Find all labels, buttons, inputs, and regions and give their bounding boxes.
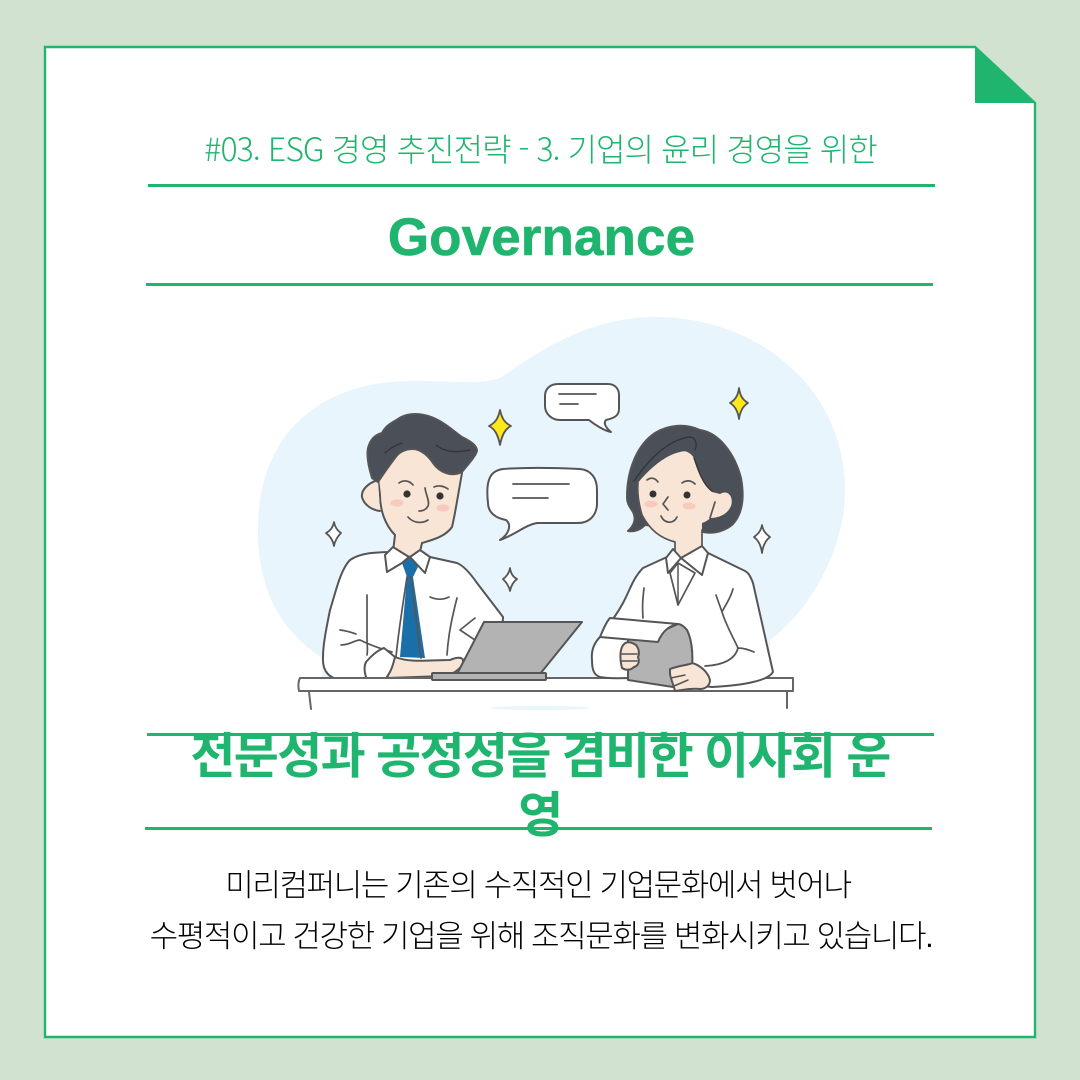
rule above heading bbox=[147, 733, 934, 736]
speech bubble: small bbox=[545, 384, 619, 432]
speech bubble: large bbox=[487, 468, 597, 540]
sparkle: white left bbox=[326, 522, 341, 546]
sparkle: yellow right bbox=[730, 388, 748, 419]
body text: 수평적이고 건강한 기업을 위해 조직문화를 변화시키고 있습니다. bbox=[150, 919, 932, 954]
body text bbox=[150, 868, 932, 954]
sparkle: white right bbox=[754, 525, 770, 553]
woman bbox=[592, 426, 773, 691]
sparkle: white centre bbox=[503, 568, 517, 591]
man bbox=[323, 414, 503, 681]
heading bbox=[190, 730, 890, 843]
laptop bbox=[432, 622, 582, 680]
sparkle: yellow left bbox=[489, 410, 511, 445]
heading: 영 bbox=[518, 789, 562, 843]
title: Governance: Governance bbox=[388, 208, 695, 267]
rule under title bbox=[146, 283, 933, 286]
rule under subtitle bbox=[148, 184, 935, 187]
rule below heading bbox=[145, 827, 932, 830]
body text: 미리컴퍼니는 기존의 수직적인 기업문화에서 벗어나 bbox=[225, 868, 851, 903]
table bbox=[298, 678, 793, 710]
heading: 전문성과 공정성을 겸비한 이사회 운 bbox=[190, 730, 890, 784]
background blob bbox=[258, 317, 845, 680]
subtitle: #03. ESG 경영 추진전략 - 3. 기업의 윤리 경영을 위한 bbox=[204, 125, 877, 171]
